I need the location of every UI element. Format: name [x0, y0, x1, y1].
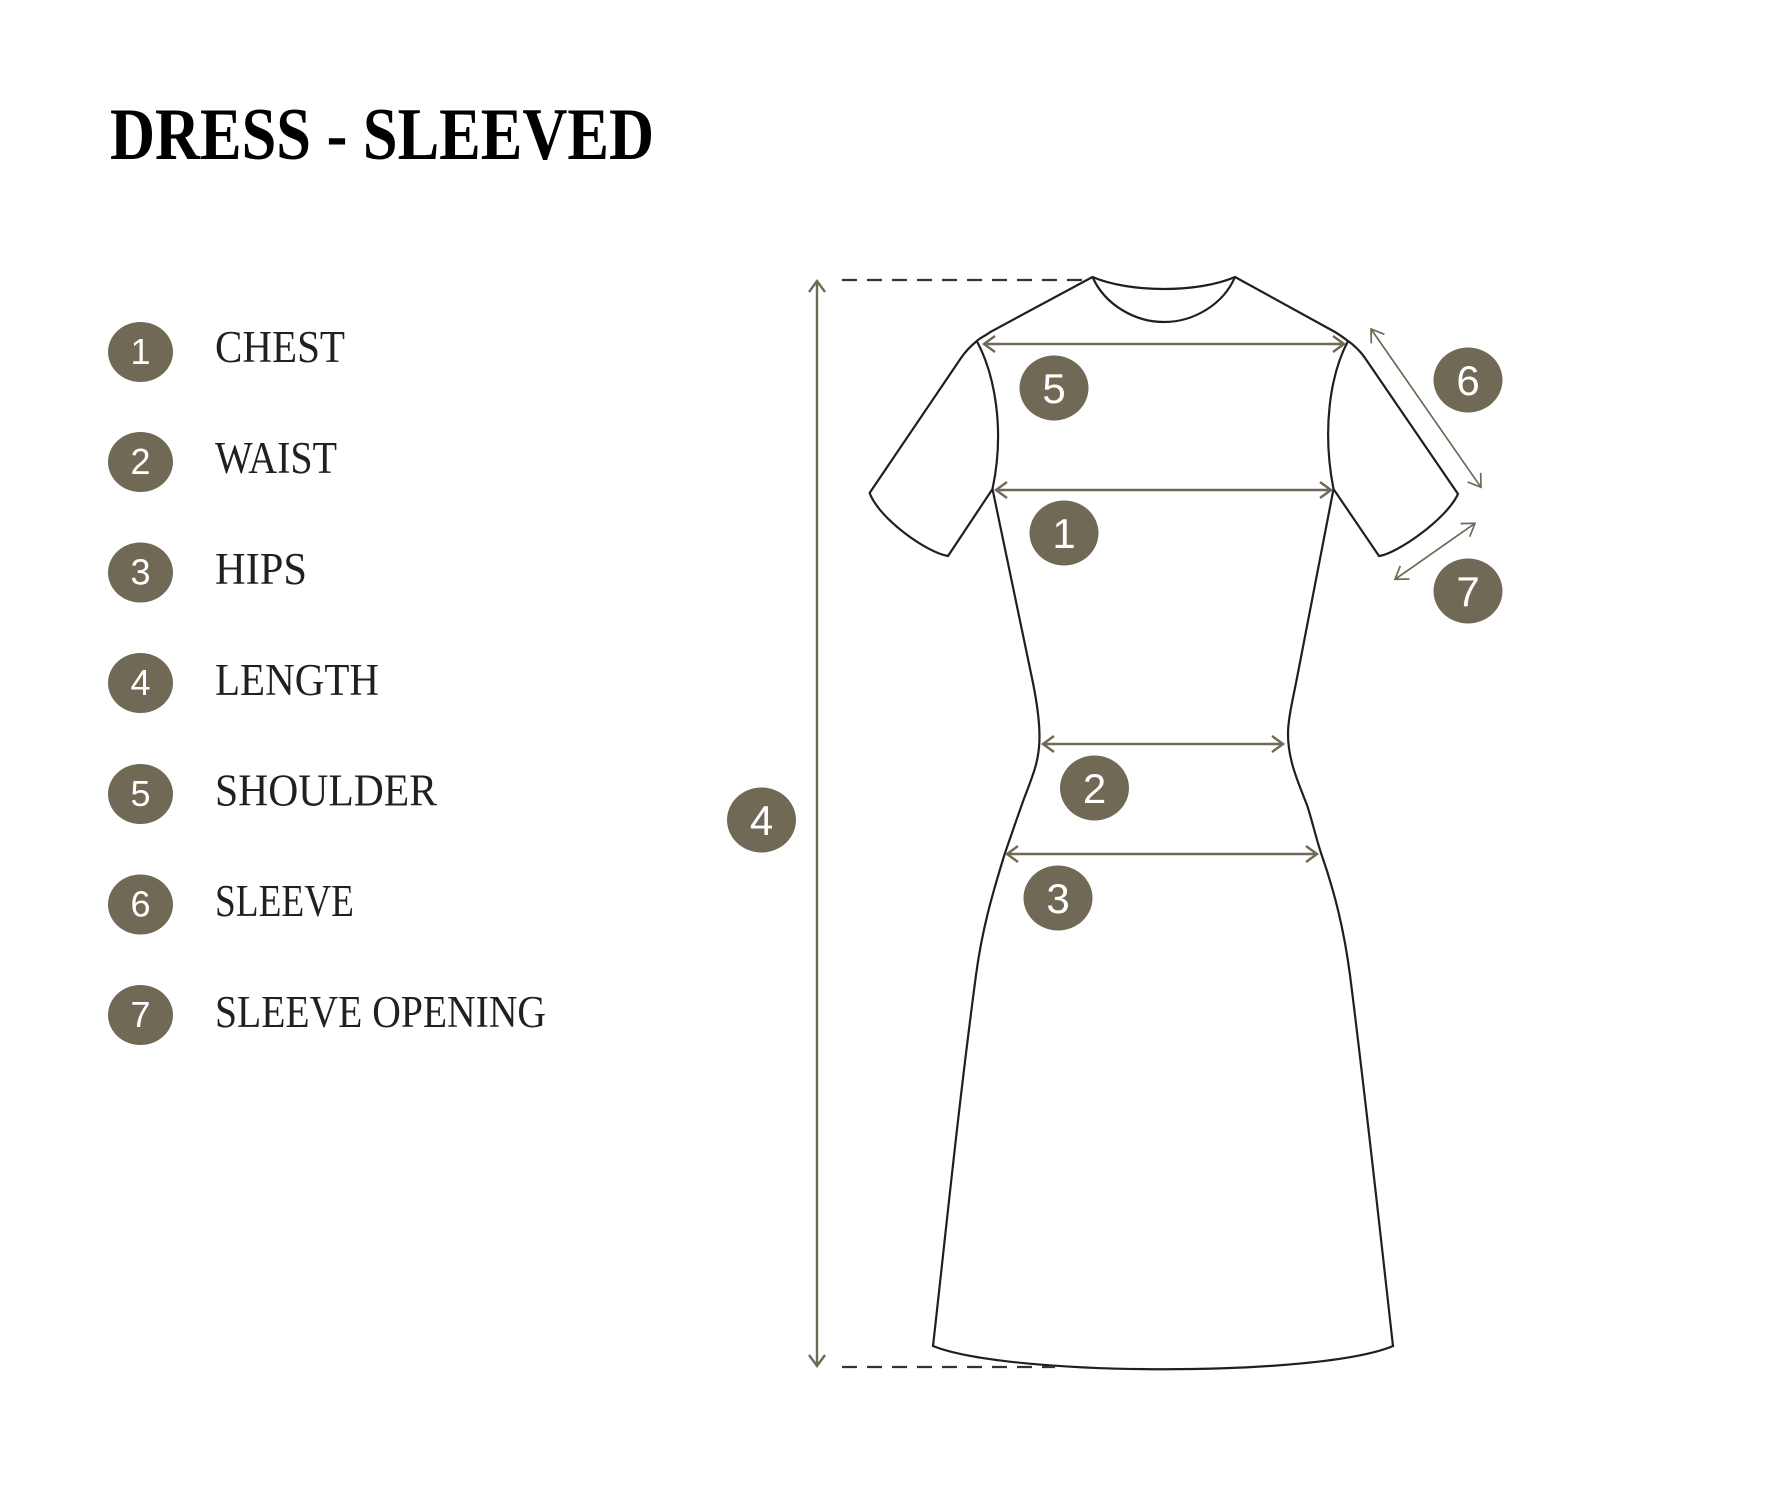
marker 2: 2 [1083, 765, 1106, 812]
legend item 3: hips: HIPS [215, 544, 307, 594]
marker 4 [727, 788, 796, 852]
legend item 4: length: 4 [130, 662, 151, 703]
legend item 6: sleeve [108, 874, 354, 934]
marker 2 [1060, 756, 1129, 820]
arrow: chest [996, 482, 1331, 498]
arrow: sleeve opening [1395, 523, 1475, 579]
marker 7 [1434, 558, 1502, 624]
arrow: hips [1007, 846, 1317, 862]
legend item 6: sleeve: SLEEVE [215, 876, 354, 926]
marker 6: 6 [1456, 357, 1480, 404]
arrow: waist [1043, 736, 1283, 752]
legend item 7: sleeve opening: 7 [130, 994, 151, 1035]
legend item 1: chest [108, 322, 345, 382]
marker 6 [1434, 348, 1502, 412]
marker 3 [1024, 866, 1092, 930]
length guide: top dashed line [842, 279, 1092, 281]
marker 5 [1020, 356, 1088, 420]
marker 1 [1030, 500, 1098, 566]
arrow: length [809, 281, 825, 1366]
legend item 2: waist [108, 432, 337, 492]
legend item 2: waist: WAIST [215, 433, 337, 483]
legend item 5: shoulder: 5 [130, 773, 151, 814]
legend item 3: hips [108, 542, 307, 602]
marker 1: 1 [1052, 510, 1076, 557]
legend item 5: shoulder: SHOULDER [215, 766, 437, 816]
legend item 5: shoulder [108, 764, 437, 824]
legend item 2: waist: 2 [130, 441, 151, 482]
title: DRESS - SLEEVED [110, 94, 654, 176]
panel: measurement legend [108, 322, 546, 1045]
legend item 1: chest: 1 [130, 331, 151, 372]
legend item 4: length [108, 653, 379, 713]
dress outline illustration [870, 277, 1458, 1369]
marker 3: 3 [1046, 875, 1070, 922]
legend item 1: chest: CHEST [215, 322, 345, 372]
marker 7: 7 [1456, 568, 1480, 615]
legend item 4: length: LENGTH [215, 655, 379, 705]
legend item 7: sleeve opening: SLEEVE OPENING [215, 987, 546, 1037]
arrow: shoulder [984, 336, 1344, 352]
marker 5: 5 [1042, 365, 1066, 412]
length guide: bottom dashed line [842, 1366, 1055, 1368]
legend item 7: sleeve opening [108, 985, 546, 1045]
legend item 6: sleeve: 6 [130, 884, 151, 924]
legend item 3: hips: 3 [130, 552, 151, 592]
marker 4: 4 [750, 797, 773, 844]
arrow: sleeve [1371, 329, 1481, 487]
